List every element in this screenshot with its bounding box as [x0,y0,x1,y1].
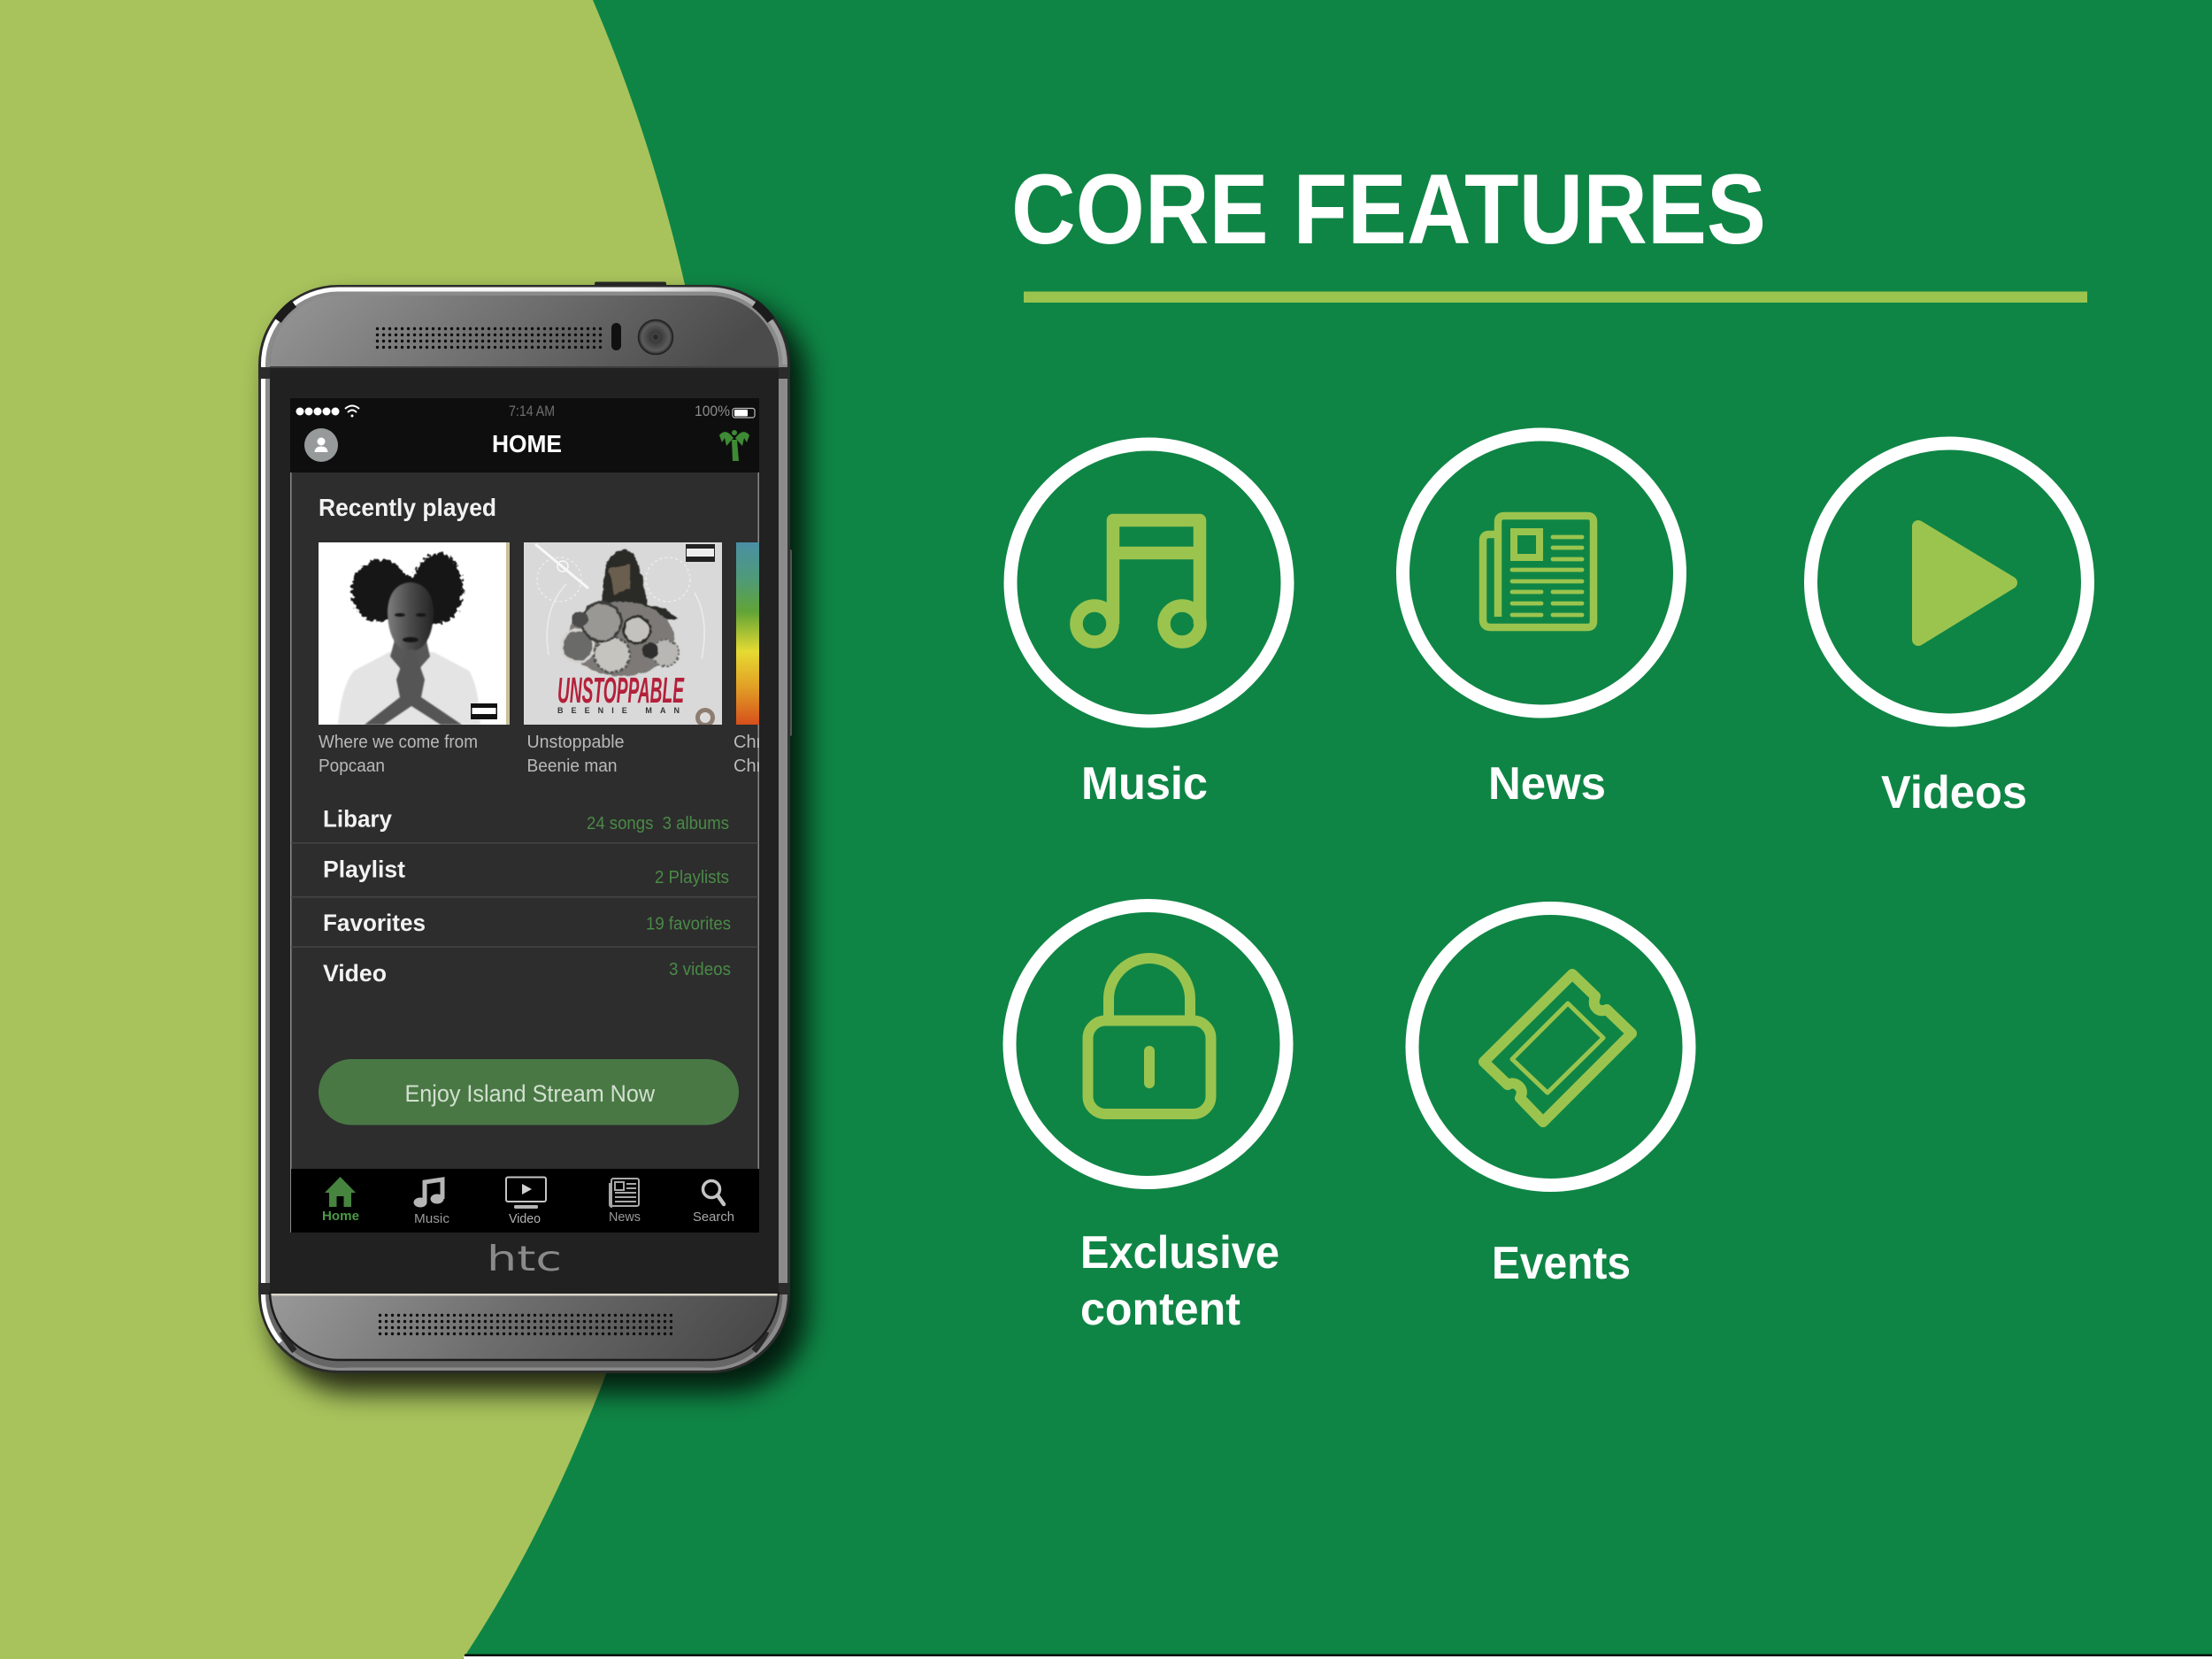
nav: news [609,1179,641,1225]
clock: 7:14 AM [509,403,555,419]
row: video: 3 videos [669,960,731,979]
icon: play triangle [1918,526,2011,640]
album cover: Unstoppable: UNSTOPPABLE [557,670,685,710]
feature: exclusive content [1010,906,1286,1335]
phone mockup [258,281,807,1393]
face [388,582,434,651]
album cover: partially visible third album [736,542,759,725]
advisory label [686,544,715,562]
icon: music notes [1076,520,1200,642]
wifi icon [345,405,359,418]
videos circle [1810,443,2088,720]
htc logo: htc [487,1240,562,1279]
row: favorites [324,913,731,931]
nav: search [693,1180,734,1225]
row: library: Libary [323,805,392,832]
row: playlist: Playlist [323,856,405,883]
album captions: Unstoppable [527,733,625,752]
sensor pill [611,323,621,350]
icon: ticket [1484,974,1632,1122]
recently played heading: Recently played [319,494,496,521]
background: light green curved shape [0,0,732,1659]
news circle [1403,434,1679,711]
gear torso [562,602,679,676]
nav: news: News [609,1210,641,1225]
signal dots [296,407,340,416]
row: video [323,962,731,982]
events circle [1412,908,1689,1186]
avatar [304,428,338,462]
bottom edge strip [464,1655,2212,1659]
album cover: Unstoppable [524,542,722,727]
exclusive label: content [1080,1284,1240,1335]
call to action button [319,1059,739,1125]
row: library [324,810,729,833]
title underline [1024,292,2087,303]
album artist: BEENIE MAN [557,706,680,715]
menu rows [291,805,758,987]
praying hands and forearms [365,649,462,725]
album captions: Popcaan [319,757,385,776]
videos label: Videos [1881,767,2027,818]
exclusive circle [1010,906,1286,1182]
hair [351,553,463,624]
album captions: Where we come from [319,733,478,752]
row: favorites: 19 favorites [646,915,731,934]
news label: News [1488,758,1606,810]
nav: home [323,1177,359,1220]
call to action button: Enjoy Island Stream Now [405,1080,655,1107]
feature: events [1412,908,1689,1289]
exclusive label [1080,1227,1279,1335]
music label: Music [1081,758,1208,810]
exclusive label: Exclusive [1080,1227,1279,1279]
battery icon [733,409,755,418]
stamp [695,708,715,725]
icon: newspaper [1483,516,1594,627]
phone body frame [258,281,792,1373]
album captions: Beenie man [527,757,618,776]
palm logo [719,430,749,461]
screen title: HOME [492,430,562,457]
artist head and torso [602,549,679,621]
front camera [639,320,672,354]
feature: videos [1810,443,2088,818]
feature: music [1010,444,1287,810]
album captions: Chris [733,733,775,752]
neck [389,640,431,669]
row: video: Video [323,960,387,987]
shirt [338,652,480,725]
phone shadow [271,301,807,1393]
nav: video: Video [509,1211,541,1226]
top speaker grille [374,326,603,350]
music circle [1010,444,1287,721]
bottom navigation [291,1169,759,1233]
nav: search: Search [693,1210,734,1225]
bottom speaker grille [377,1312,672,1337]
nav: home: Home [322,1209,359,1224]
row: playlist: 2 Playlists [655,868,729,887]
decorative gears and needle [535,544,704,659]
album cover: Where we come from [319,542,510,725]
nav: music: Music [414,1211,450,1226]
album captions [319,733,775,776]
screen side lines [290,472,759,1233]
advisory label [471,703,497,719]
battery percent: 100% [695,403,730,419]
row: playlist [324,860,729,887]
status and title bar [290,398,759,472]
nav: video [506,1177,546,1226]
eyes and mouth [395,613,426,642]
row: favorites: Favorites [323,910,426,936]
feature: news [1403,434,1679,810]
events label: Events [1492,1238,1631,1289]
album captions: Chris [733,757,775,776]
app screen [290,398,775,1233]
icon: padlock [1088,958,1210,1114]
row: library: 24 songs 3 albums [587,814,729,833]
nav: music [414,1179,450,1226]
phone face panels [270,296,779,1361]
title: CORE FEATURES [1011,154,1766,265]
